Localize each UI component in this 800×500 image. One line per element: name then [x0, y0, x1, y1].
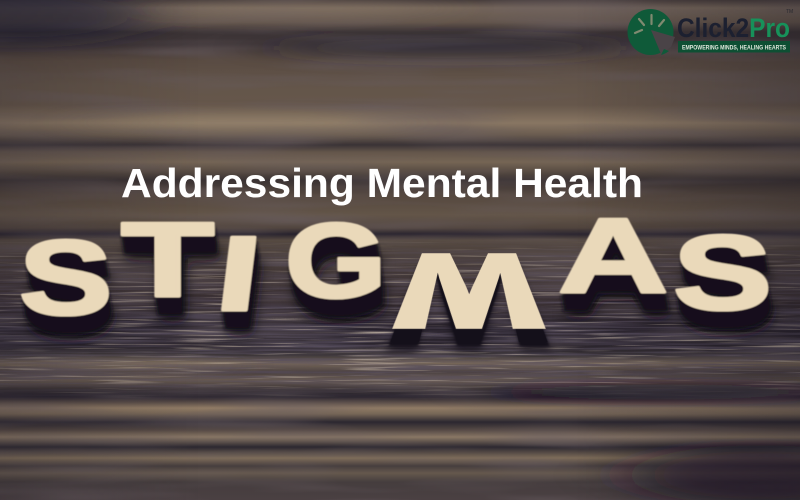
icon: green dial circle: [628, 9, 675, 55]
letter I: I: [210, 215, 267, 333]
logo: Click2Pro: [628, 9, 793, 55]
letter T: T: [121, 200, 214, 319]
title: Addressing Mental Health: [121, 160, 643, 206]
logo tagline bar: [678, 41, 790, 52]
trademark mark: TM: [786, 9, 793, 15]
letter M in perspective: M: [362, 242, 576, 372]
letter S: S: [673, 214, 772, 332]
logo wordmark: Click2Pro: [677, 13, 790, 43]
wooden letters: S T I G A S with dark extruded sides: [19, 196, 772, 337]
letter G: G: [285, 202, 386, 320]
letter S: S: [19, 219, 112, 337]
letter A: A: [558, 196, 668, 315]
